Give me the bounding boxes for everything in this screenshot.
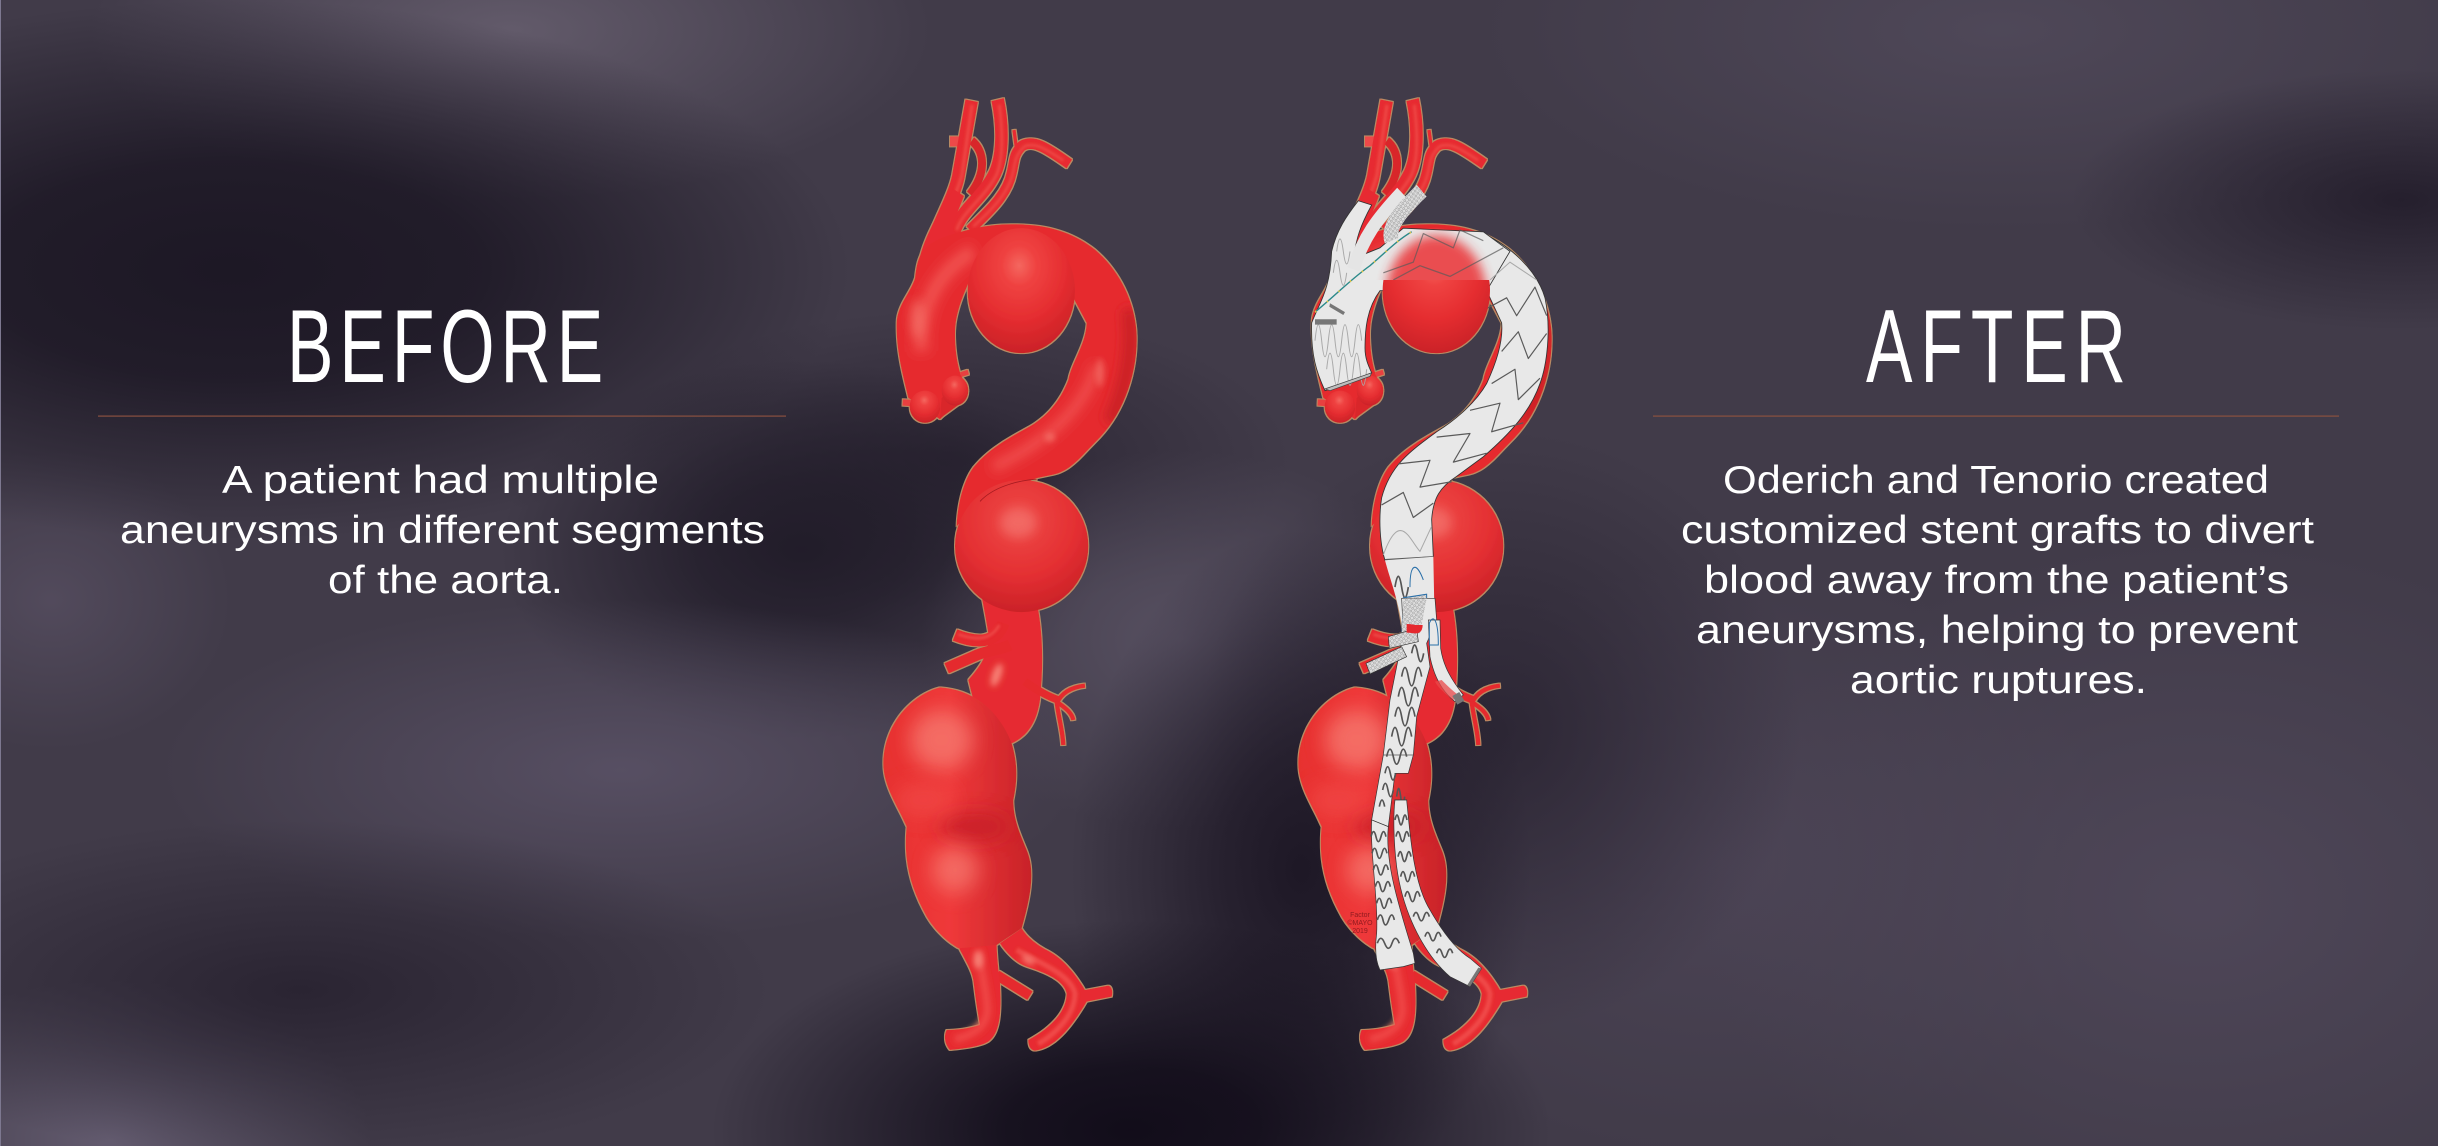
signature: medical illustrator credit: Factor — [1350, 912, 1371, 919]
stent graft: arch and descending thoracic — [1312, 191, 1548, 640]
divider: before — [98, 416, 786, 417]
heading: AFTER: AFTER — [1866, 288, 2126, 404]
text block: after description: aortic ruptures. — [1850, 659, 2147, 702]
stent graft: abdominal section and iliac limbs — [1347, 598, 1482, 987]
text block: after description: Oderich and Tenorio created — [1723, 459, 2269, 502]
signature: medical illustrator credit: 2019 — [1352, 928, 1368, 935]
text block: before description — [120, 459, 765, 602]
heading: BEFORE: BEFORE — [287, 288, 603, 404]
illustration: aorta before treatment — [883, 100, 1137, 1051]
divider: after — [1653, 416, 2339, 417]
text block: after description — [1681, 459, 2314, 702]
text block: after description: blood away from the patient’s — [1704, 559, 2289, 602]
signature: medical illustrator credit — [1347, 912, 1373, 935]
signature: medical illustrator credit: ©MAYO — [1347, 919, 1373, 927]
illustration: aorta after treatment — [1298, 100, 1552, 1051]
text block: before description: of the aorta. — [328, 559, 563, 602]
text block: before description: aneurysms in different segments — [120, 509, 765, 552]
text block: after description: aneurysms, helping to prevent — [1696, 609, 2298, 652]
text block: before description: A patient had multiple — [222, 459, 659, 502]
text block: after description: customized stent grafts to divert — [1681, 509, 2314, 552]
iliac arteries — [945, 928, 1112, 1051]
